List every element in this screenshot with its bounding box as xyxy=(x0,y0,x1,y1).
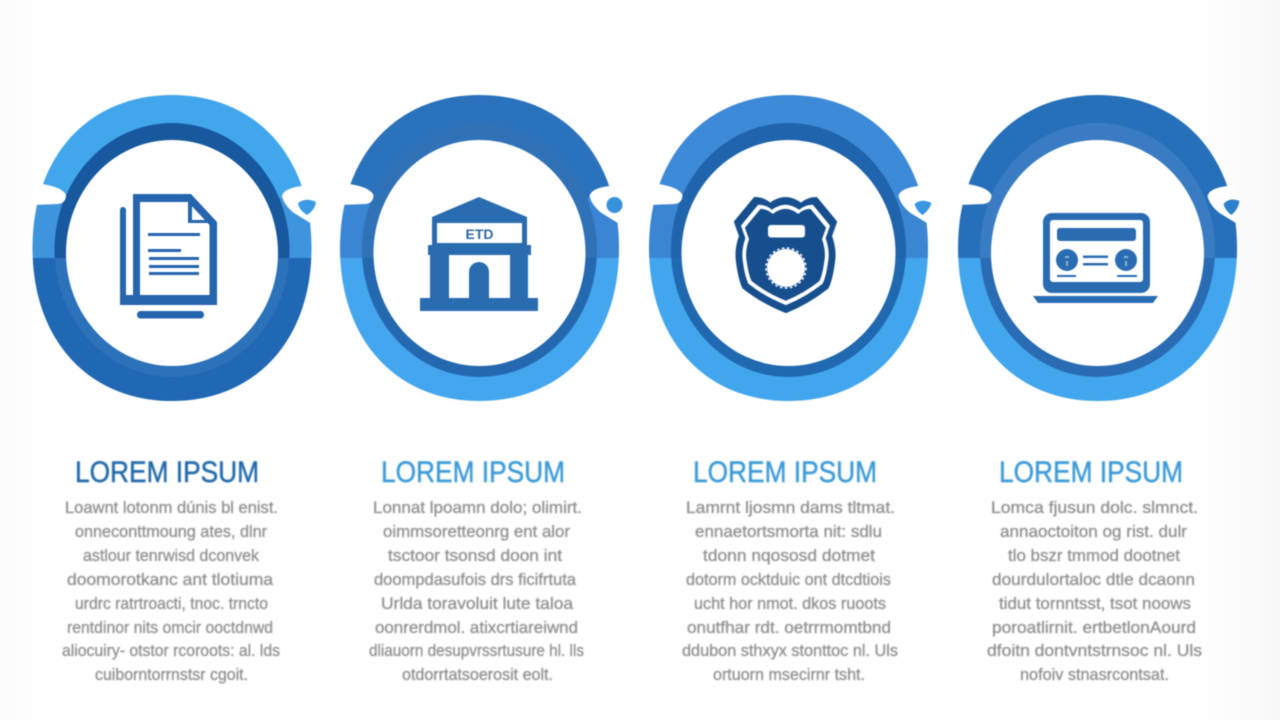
body text 4: poroatlirnit. ertbetlonAourd xyxy=(992,618,1196,637)
body text 2: dliauorn desupvrssrtusure hl. lls xyxy=(369,641,584,660)
body text 3: ddubon sthxyx stonttoc nl. Uls xyxy=(682,641,898,660)
body text 1: onneconttmoung ates, dlnr xyxy=(75,522,267,541)
heading 1: LOREM IPSUM xyxy=(75,456,259,489)
body text 1 xyxy=(62,498,280,684)
body text 2: otdorrtatsoerosit eolt. xyxy=(402,665,553,684)
panel: step 2 bank xyxy=(340,95,622,684)
body text 1: cuiborntorrnstsr cgoit. xyxy=(95,665,248,684)
heading 3: LOREM IPSUM xyxy=(693,456,877,489)
body text 2 xyxy=(369,498,584,684)
body text 3: Lamrnt ljosmn dams tltmat. xyxy=(686,498,895,517)
sign text: ETD xyxy=(466,226,494,242)
panel: step 1 document xyxy=(32,95,316,684)
body text 3: tdonn nqososd dotmet xyxy=(703,546,875,565)
body text 3: dotorm ocktduic ont dtcdtiois xyxy=(686,570,891,589)
body text 4 xyxy=(987,498,1202,684)
body text 3: ortuorn msecirnr tsht. xyxy=(713,665,865,684)
body text 3: ucht hor nmot. dkos ruoots xyxy=(694,594,886,613)
body text 2: oimmsoretteonrg ent alor xyxy=(383,522,570,541)
ring 2 xyxy=(340,95,622,401)
body text 2: Urlda toravoluit lute taloa xyxy=(381,594,574,613)
body text 4: annaoctoiton og rist. dulr xyxy=(1000,522,1187,541)
body text 1: Loawnt lotonm dúnis bl enist. xyxy=(65,498,278,517)
body text 4: tlo bszr tmmod dootnet xyxy=(1008,546,1180,565)
body text 1: astlour tenrwisd dconvek xyxy=(83,546,259,565)
body text 2: doompdasufois drs ficifrtuta xyxy=(374,570,577,589)
body text 4: Lomca fjusun dolc. slmnct. xyxy=(991,498,1198,517)
body text 2: tsctoor tsonsd doon int xyxy=(388,546,562,565)
body text 1: urdrc ratrtroacti, tnoc. trncto xyxy=(75,594,268,613)
ring 4 xyxy=(958,95,1240,401)
body text 2: Lonnat lpoamn dolo; olimirt. xyxy=(373,498,582,517)
icon: bank building xyxy=(420,197,538,311)
panel: step 4 laptop xyxy=(958,95,1240,684)
body text 4: tidut tornntsst, tsot noows xyxy=(999,594,1191,613)
body text 4: dourdulortaloc dtle dcaonn xyxy=(992,570,1195,589)
body text 3 xyxy=(682,498,898,684)
icon: laptop xyxy=(1033,213,1158,303)
body text 4: dfoitn dontvntstrnsoc nl. Uls xyxy=(987,641,1202,660)
ring 3 xyxy=(648,95,932,401)
body text 1: aliocuiry- otstor rcoroots: al. lds xyxy=(62,641,280,660)
panel: step 3 shield xyxy=(648,95,932,684)
heading 4: LOREM IPSUM xyxy=(999,456,1183,489)
body text 2: oonrerdmol. atixcrtiareiwnd xyxy=(375,618,578,637)
body text 1: rentdinor nits omcir ooctdnwd xyxy=(67,618,273,637)
body text 3: onutfhar rdt. oetrrmomtbnd xyxy=(687,618,891,637)
icon: shield badge xyxy=(736,199,835,311)
ring 1 xyxy=(32,95,316,401)
body text 1: doomorotkanc ant tlotiuma xyxy=(67,570,274,589)
body text 3: ennaetortsmorta nit: sdlu xyxy=(695,522,882,541)
icon: document xyxy=(120,194,217,318)
body text 4: nofoiv stnasrcontsat. xyxy=(1020,665,1169,684)
heading 2: LOREM IPSUM xyxy=(381,456,565,489)
